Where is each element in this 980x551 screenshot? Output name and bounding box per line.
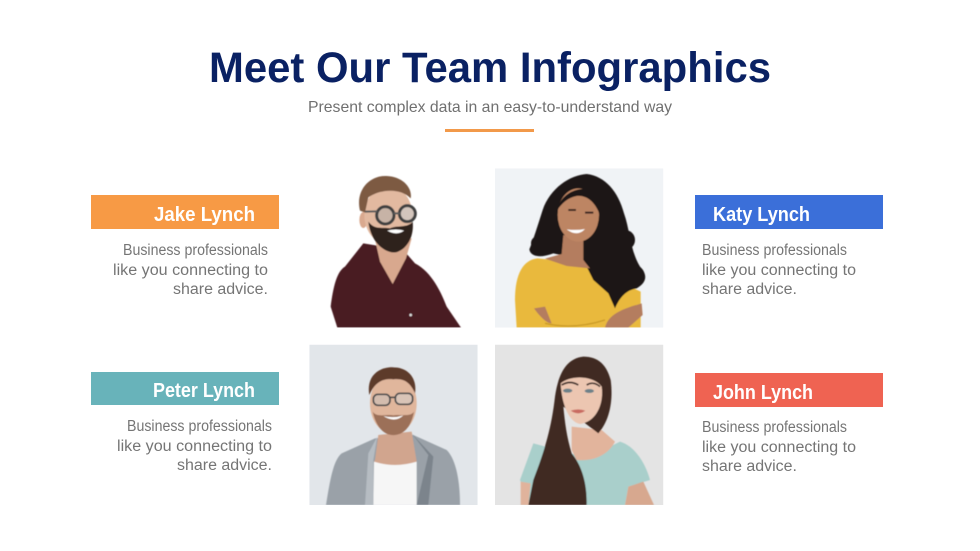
description: Business professionals	[702, 419, 847, 436]
description	[113, 242, 268, 298]
description: like you connecting to	[117, 438, 272, 455]
accent rule	[445, 129, 534, 132]
photo: man with dark red shirt	[331, 176, 461, 328]
card: Jake Lynch	[91, 195, 279, 298]
description: share advice.	[177, 457, 272, 474]
description: share advice.	[173, 281, 268, 298]
description: share advice.	[702, 458, 797, 475]
title: Meet Our Team Infographics	[209, 44, 771, 92]
name bar	[695, 195, 883, 229]
name bar: Peter Lynch	[153, 380, 255, 402]
description	[702, 419, 856, 475]
description: like you connecting to	[113, 262, 268, 279]
description	[702, 242, 856, 298]
photo: woman with long brown hair	[495, 345, 663, 505]
description: Business professionals	[123, 242, 268, 259]
description: share advice.	[702, 281, 797, 298]
name bar	[695, 373, 883, 407]
subtitle: Present complex data in an easy-to-understand way	[308, 99, 672, 116]
name bar	[91, 372, 279, 405]
name bar: Jake Lynch	[154, 204, 255, 226]
card: Katy Lynch	[695, 195, 883, 298]
description: like you connecting to	[702, 262, 856, 279]
description	[117, 418, 272, 474]
description: like you connecting to	[702, 439, 856, 456]
name bar: John Lynch	[713, 382, 813, 404]
description: Business professionals	[702, 242, 847, 259]
name bar	[91, 195, 279, 229]
name bar: Katy Lynch	[713, 204, 810, 226]
card: Peter Lynch	[91, 372, 279, 474]
photo: woman with yellow sweater	[495, 168, 663, 328]
description: Business professionals	[127, 418, 272, 435]
photo: man with grey blazer	[309, 345, 478, 505]
infographic slide	[91, 51, 883, 505]
card: John Lynch	[695, 373, 883, 475]
